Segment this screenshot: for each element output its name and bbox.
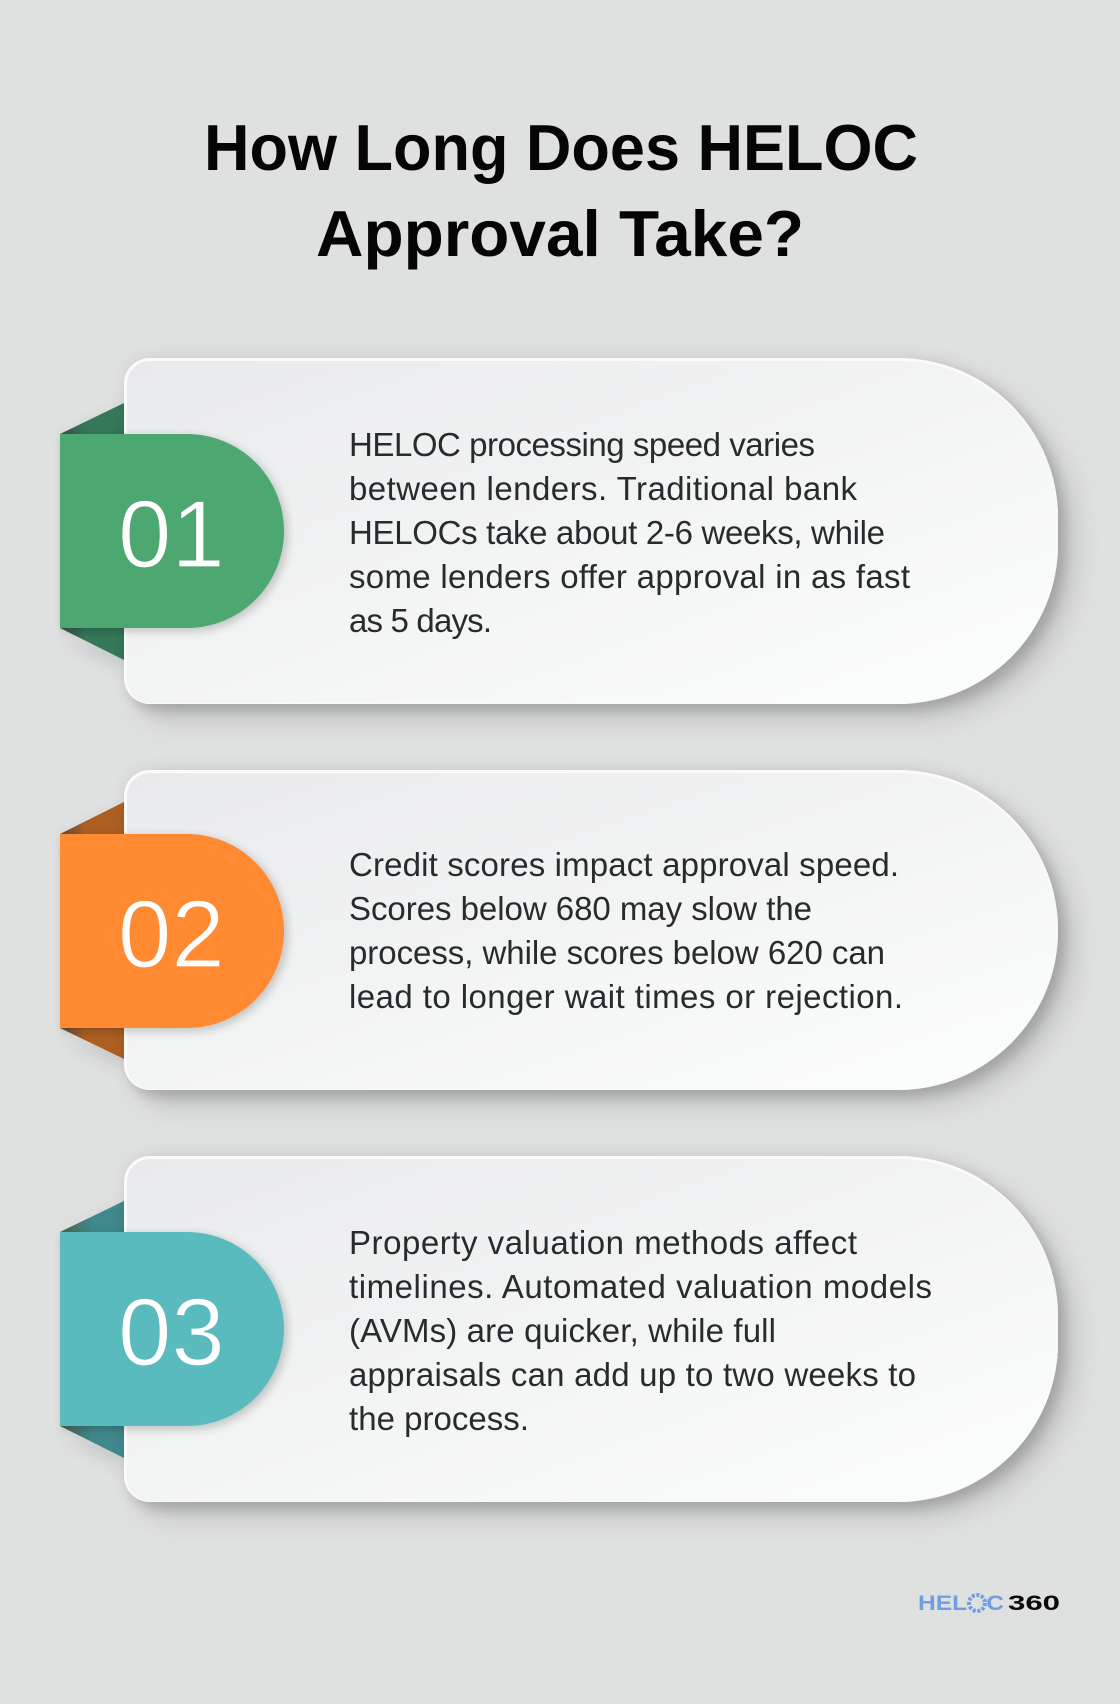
logo: HELOC360 [918, 1592, 1060, 1615]
text block: step 01: HELOCs take about 2-6 weeks, while [349, 514, 885, 551]
text block: step 03: the process. [349, 1400, 529, 1437]
folded ribbon flaps: step 03 [60, 1201, 124, 1458]
text block: step 03: timelines. Automated valuation models [349, 1268, 932, 1305]
panel: step 01 [60, 358, 1058, 704]
card: step 01 [124, 358, 1058, 704]
folded ribbon flaps: step 01 [60, 403, 124, 660]
badge: step 03 [60, 1232, 284, 1426]
logo: HELOC360: HEL OC [918, 1592, 1004, 1615]
text block: step 01: as 5 days. [349, 602, 492, 639]
text block: step 02: process, while scores below 620 can [349, 934, 885, 971]
card: step 03 [124, 1156, 1058, 1502]
title: How Long Does HELOC [204, 111, 918, 184]
title [204, 111, 918, 270]
text block: step 02: Scores below 680 may slow the [349, 890, 812, 927]
number: 02: 02 [118, 881, 225, 988]
text block: step 03: Property valuation methods affect [349, 1224, 857, 1261]
text block: step 02 [349, 846, 903, 1015]
text block: step 01: HELOC processing speed varies [349, 426, 815, 463]
badge: step 01 [60, 434, 284, 628]
text block: step 01: some lenders offer approval in as fast [349, 558, 910, 595]
logo: HELOC360: 360 [1008, 1592, 1060, 1615]
number: 03: 03 [118, 1279, 225, 1386]
panel: step 02 [60, 770, 1058, 1090]
text block: step 01 [349, 426, 910, 639]
text block: step 02: lead to longer wait times or rejection. [349, 978, 903, 1015]
panel: step 03 [60, 1156, 1058, 1502]
card: step 02 [124, 770, 1058, 1090]
text block: step 03: (AVMs) are quicker, while full [349, 1312, 776, 1349]
text block: step 03: appraisals can add up to two weeks to [349, 1356, 916, 1393]
text block: step 03 [349, 1224, 932, 1437]
folded ribbon flaps: step 02 [60, 802, 124, 1059]
badge: step 02 [60, 834, 284, 1028]
text block: step 01: between lenders. Traditional bank [349, 470, 858, 507]
title: Approval Take? [316, 197, 804, 270]
text block: step 02: Credit scores impact approval speed. [349, 846, 899, 883]
number: 01: 01 [118, 481, 225, 588]
